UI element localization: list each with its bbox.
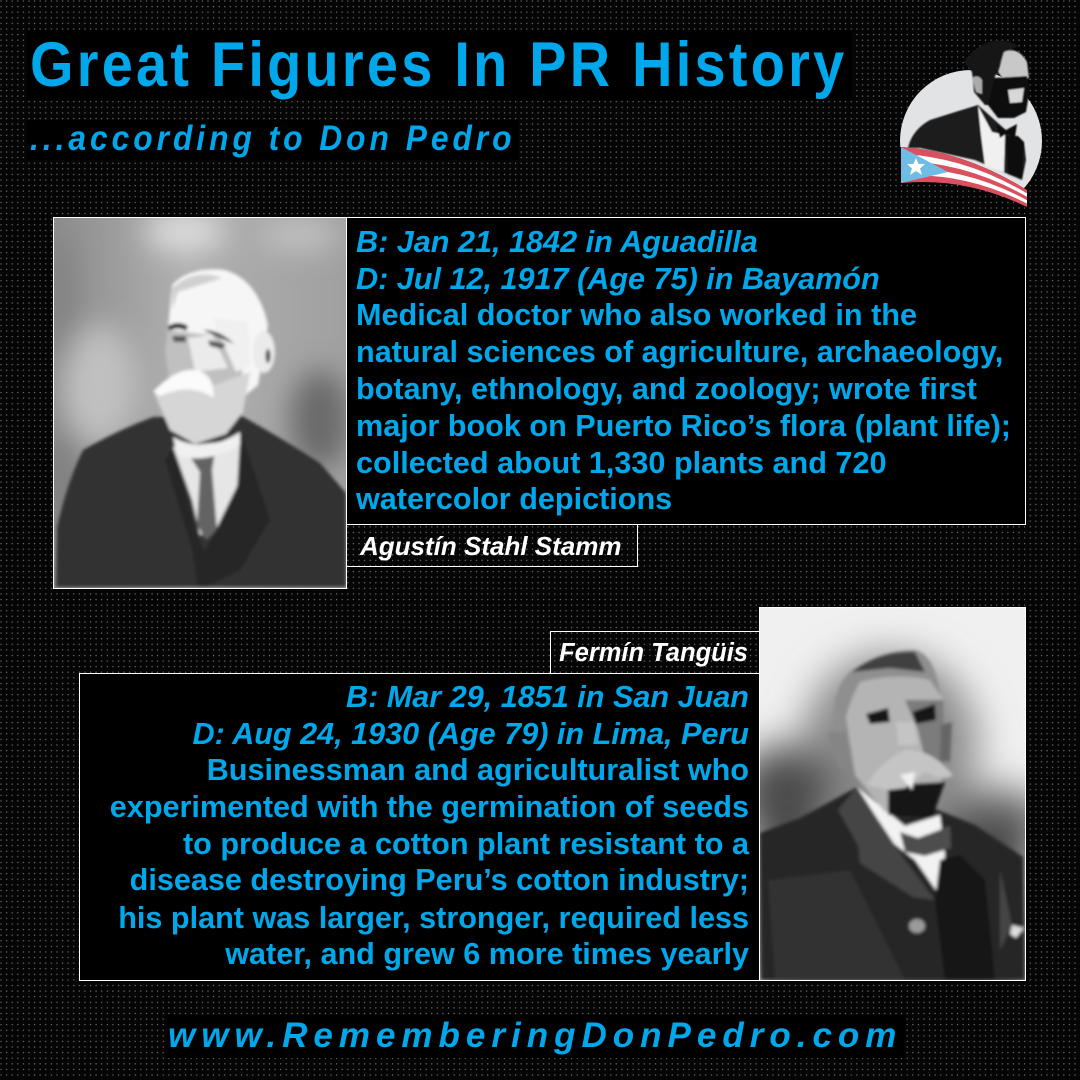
biography text box: his plant was larger, stronger, required less xyxy=(118,901,749,935)
biography text box: B: Jan 21, 1842 in Aguadilla xyxy=(356,225,758,259)
biography text box: B: Mar 29, 1851 in San Juan xyxy=(346,680,749,714)
portrait: Agustín Stahl xyxy=(54,218,346,588)
biography text box: D: Jul 12, 1917 (Age 75) in Bayamón xyxy=(356,262,880,296)
biography text box: disease destroying Peru’s cotton industry; xyxy=(130,863,749,897)
title: Great Figures In PR History xyxy=(30,30,847,100)
biography text box: watercolor depictions xyxy=(356,482,672,516)
name label: Fermín Tangüis xyxy=(559,639,748,667)
name label xyxy=(550,631,760,674)
footer website: www.RememberingDonPedro.com xyxy=(168,1016,902,1055)
biography text box: collected about 1,330 plants and 720 xyxy=(356,446,886,480)
border xyxy=(53,217,347,589)
panel: Agustín Stahl Stamm xyxy=(53,217,1026,589)
portrait: Fermín Tangüis xyxy=(760,608,1025,980)
biography text box: major book on Puerto Rico’s flora (plant life); xyxy=(356,409,1011,443)
icon: Don Pedro logo with flag xyxy=(900,40,1042,207)
biography text box: to produce a cotton plant resistant to a xyxy=(183,827,749,861)
panel: Fermín Tangüis xyxy=(79,607,1026,981)
border xyxy=(759,607,1026,981)
biography text box: experimented with the germination of seeds xyxy=(110,790,749,824)
biography text box xyxy=(346,217,1026,525)
biography text box xyxy=(79,673,760,981)
name label xyxy=(346,524,638,567)
biography text box: Medical doctor who also worked in the xyxy=(356,298,917,332)
biography text box: natural sciences of agriculture, archaeology, xyxy=(356,335,1003,369)
biography text box: Businessman and agriculturalist who xyxy=(207,753,749,787)
biography text box: D: Aug 24, 1930 (Age 79) in Lima, Peru xyxy=(192,717,749,751)
subtitle: ...according to Don Pedro xyxy=(30,119,516,158)
biography text box: water, and grew 6 more times yearly xyxy=(225,937,749,971)
biography text box: botany, ethnology, and zoology; wrote first xyxy=(356,372,977,406)
name label: Agustín Stahl Stamm xyxy=(360,531,621,561)
